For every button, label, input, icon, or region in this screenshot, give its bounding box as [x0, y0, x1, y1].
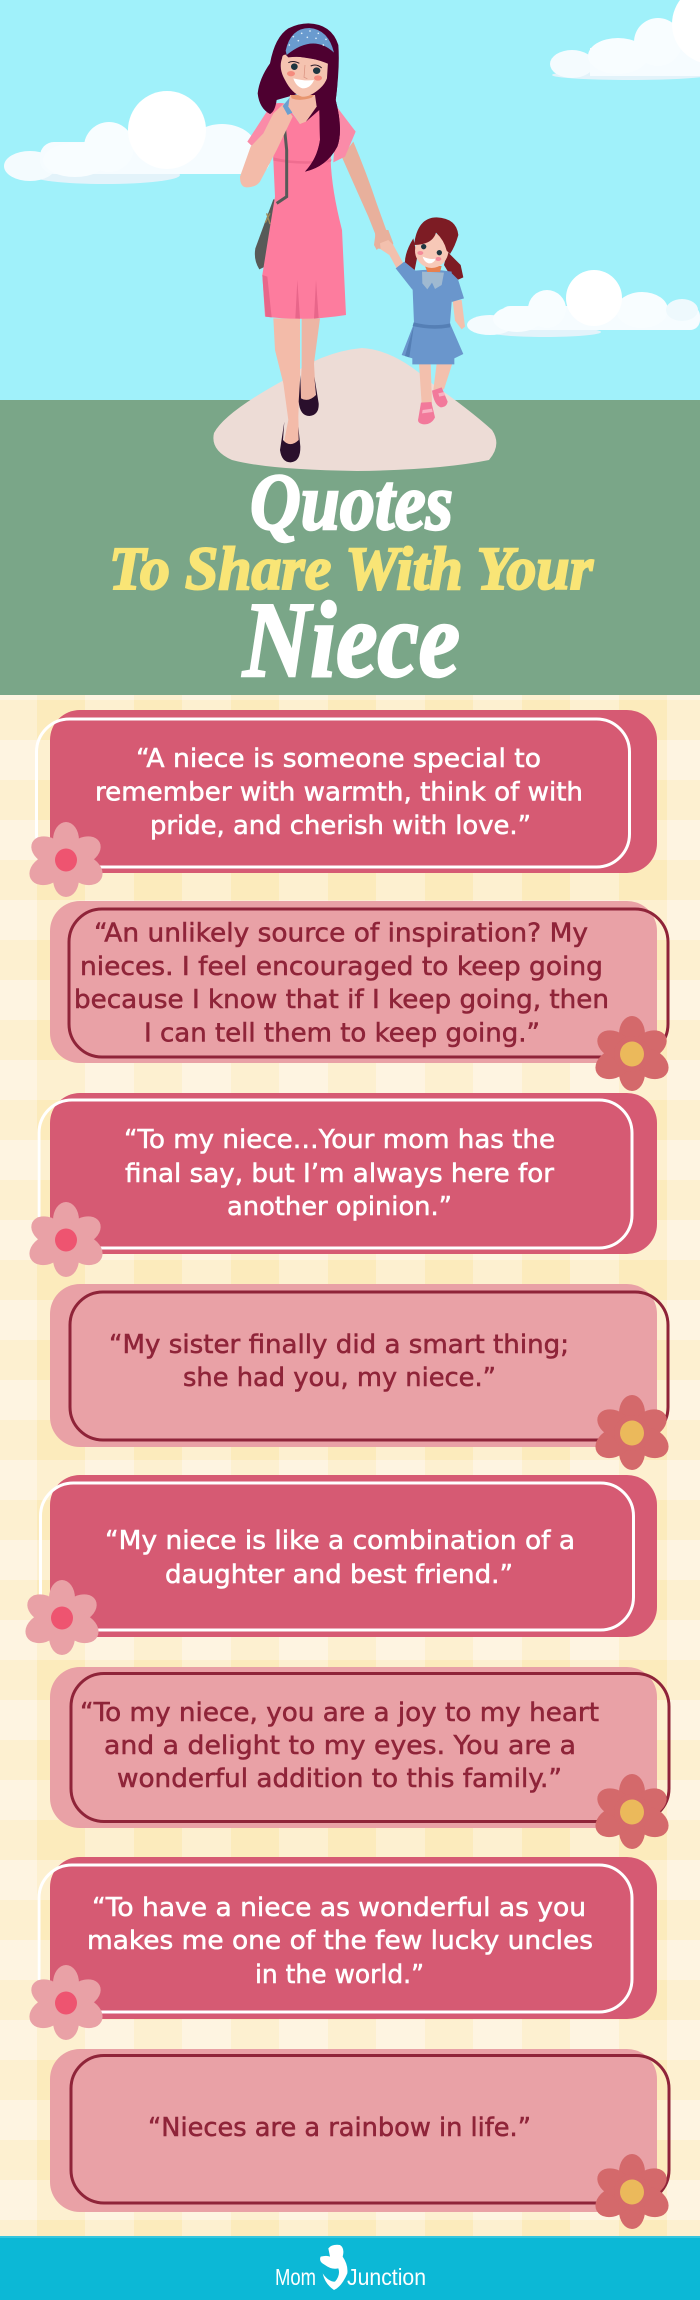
girl head: [414, 217, 458, 268]
viewer-right arm: [342, 142, 393, 250]
hill path: [213, 348, 496, 471]
face details: [287, 61, 322, 88]
quote 7 text: in the world.”: [255, 1960, 424, 1990]
cloud: top right: [550, 0, 700, 80]
panel: quote 5: [20, 1475, 657, 1655]
sky: [0, 0, 700, 401]
quote 3 text: “To my niece…Your mom has the: [124, 1125, 555, 1155]
icon: flower: [24, 822, 108, 897]
quote 2 text: I can tell them to keep going.”: [144, 1018, 540, 1048]
panel: quote 6: [50, 1667, 674, 1849]
quote 1 text: remember with warmth, think of with: [95, 778, 583, 808]
icon: flower: [590, 2154, 674, 2229]
quote 2 text: “An unlikely source of inspiration? My: [94, 918, 588, 948]
neck: [288, 95, 317, 124]
quote 8 text: “Nieces are a rainbow in life.”: [148, 2113, 531, 2143]
girl dress: [396, 262, 464, 364]
quote 6 text: “To my niece, you are a joy to my heart: [80, 1698, 599, 1728]
girl neck: [425, 266, 442, 272]
panel: quote 2: [50, 901, 674, 1091]
quote 3 text: final say, but I’m always here for: [125, 1159, 554, 1189]
title line: Niece: Niece: [242, 581, 460, 700]
icon: flower: [20, 1580, 104, 1655]
quote 4 text: “My sister finally did a smart thing;: [109, 1330, 569, 1360]
panel: quote 8: [50, 2049, 674, 2229]
dress: [247, 103, 356, 319]
quote 1 text: [95, 744, 583, 841]
logo wordmark: Mom: Mom: [275, 2264, 316, 2290]
girl shoes: [418, 387, 448, 424]
back hair: [258, 23, 340, 172]
girl legs: [419, 363, 452, 404]
quote 1 text: pride, and cherish with love.”: [150, 811, 531, 841]
footer: [0, 2236, 700, 2300]
bag: [255, 199, 288, 269]
quote 6 text: [80, 1698, 599, 1794]
quote 2 text: because I know that if I keep going, then: [74, 985, 609, 1015]
quote 5 text: daughter and best friend.”: [165, 1560, 513, 1590]
logo: [275, 2245, 426, 2290]
face: [281, 55, 329, 97]
icon: flower: [24, 1202, 108, 1277]
bag strap: [277, 110, 287, 203]
title: [109, 459, 594, 700]
panel: quote 1: [24, 710, 657, 897]
ground: [0, 400, 700, 695]
quote 7 text: [87, 1893, 593, 1990]
quote 5 text: [105, 1526, 575, 1590]
girl pigtails: [405, 238, 463, 280]
title line: To Share With Your: To Share With Your: [109, 536, 594, 603]
quote 3 text: another opinion.”: [227, 1192, 452, 1222]
cloud: lower right: [467, 270, 700, 337]
quote 6 text: wonderful addition to this family.”: [117, 1764, 562, 1794]
panel: quote 4: [50, 1284, 674, 1470]
fringe and headband: [286, 28, 334, 64]
viewer-left arm: [240, 104, 293, 187]
icon: mother and child heart: [320, 2245, 347, 2290]
title line: Quotes: Quotes: [250, 459, 453, 547]
quote 2 text: nieces. I feel encouraged to keep going: [80, 952, 603, 982]
cloud: left: [4, 91, 270, 184]
panel: quote 7: [24, 1857, 657, 2040]
right hair lock: [305, 52, 340, 172]
icon: flower: [590, 1395, 674, 1470]
quote 4 text: [109, 1330, 569, 1393]
icon: flower: [590, 1774, 674, 1849]
shoes: [280, 375, 319, 462]
mother's hand: [374, 230, 393, 250]
gingham background: [0, 695, 700, 2240]
collar: [283, 96, 292, 115]
quote 4 text: she had you, my niece.”: [183, 1363, 496, 1393]
mother figure: [240, 23, 393, 462]
quote 3 text: [124, 1125, 555, 1222]
girl figure: [374, 217, 465, 424]
quote 6 text: and a delight to my eyes. You are a: [104, 1731, 576, 1761]
quote 7 text: “To have a niece as wonderful as you: [92, 1893, 586, 1923]
panel: quote 3: [24, 1093, 657, 1277]
quote 7 text: makes me one of the few lucky uncles: [87, 1926, 593, 1956]
quote 1 text: “A niece is someone special to: [136, 744, 541, 774]
legs: [273, 318, 320, 445]
quote 5 text: “My niece is like a combination of a: [105, 1526, 575, 1556]
girl raised arm: [380, 240, 403, 268]
logo wordmark: Junction: Junction: [347, 2264, 426, 2290]
quote 2 text: [74, 918, 609, 1048]
girl right arm: [453, 300, 465, 329]
icon: flower: [590, 1016, 674, 1091]
icon: flower: [24, 1965, 108, 2040]
